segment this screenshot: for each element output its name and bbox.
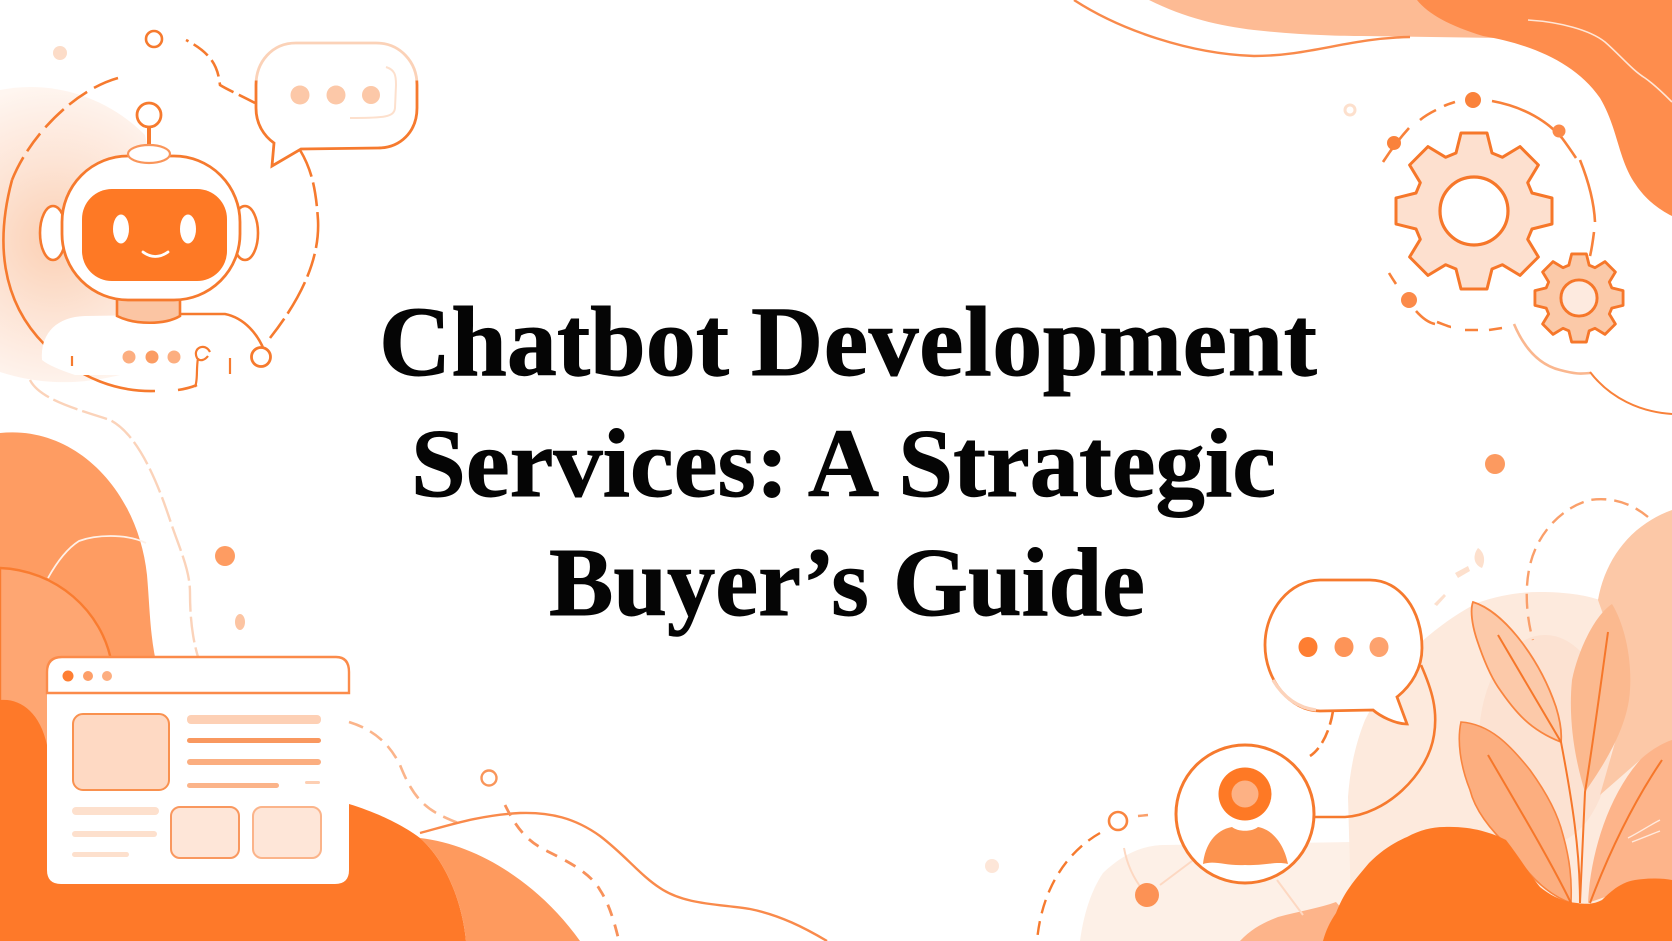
decoration: dot bottom [1135,883,1159,907]
dashed orbit [3,78,318,391]
leaf highlights [1628,820,1660,842]
background blob: bottom left dark [0,700,466,941]
title line 3: Buyer’s Guide [549,529,1145,637]
decoration: pale dot top left [53,46,67,60]
ring on body [252,348,270,366]
avatar body [1203,827,1288,865]
robot body [42,314,263,375]
background blob: left arc [0,568,112,800]
bubble dots [290,86,380,104]
chest dots [122,350,180,364]
background blob: pale bottom centre [1080,842,1352,941]
decorative line: white arc on left blob [48,536,146,578]
background blob: robot glow [0,87,170,382]
decorative line: top right white squiggle [1528,20,1672,102]
decoration: dash near ring [1138,815,1148,816]
background blob: top right dark [1417,0,1672,216]
decorative line: top wave [1074,0,1410,56]
browser window illustration [47,657,349,884]
decoration: dot left [215,546,235,566]
decorative line: bottom wave [420,813,827,941]
plant illustration [1459,602,1672,903]
decoration: ring bottom [1109,812,1127,830]
robot neck [117,298,180,323]
robot antenna [137,103,161,148]
gears illustration [1345,92,1672,414]
orbit dashes [1383,101,1672,414]
robot head [62,156,240,300]
image placeholder small two [253,807,321,858]
title [379,286,1318,637]
window control dots [62,670,112,682]
robot ears [40,206,258,260]
leaf top right [1571,604,1630,792]
decorative line: bottom dashed [505,805,619,941]
decorative line: dashed from window [349,722,462,824]
image placeholder small one [171,807,239,858]
decoration: small drop left [235,614,245,630]
robot smile [143,252,168,256]
robot illustration [3,31,318,391]
text lines right [187,715,321,788]
leaf middle left [1459,722,1571,903]
title line 2: Services: A Strategic [411,410,1276,518]
background blob: left mid orange [0,432,158,800]
leaf veins and stem [1488,632,1662,903]
background blob: bottom right mid [1240,902,1370,941]
decorative line: dashed link between user and bubble [1310,711,1333,756]
decorative line: left dashed path [30,380,198,657]
inner highlight [350,67,396,118]
text lines left [72,807,159,857]
decoration: ring near bottom [482,770,496,786]
bubble outline [256,43,417,166]
chat bubble top left [256,43,417,166]
title line 1: Chatbot [379,286,729,397]
chest marks [72,347,230,387]
avatar circle [1176,745,1314,883]
background blob: peach right [1598,510,1672,795]
image placeholder large [73,714,169,790]
leaf top left [1472,602,1561,742]
antenna cap [128,145,170,163]
pale edge [1273,680,1316,710]
decorative line: right dashed arc [1527,499,1648,640]
robot face screen [82,189,227,281]
background blob: inner pale behind plant [1479,635,1611,845]
decoration: dot right [1485,454,1505,474]
avatar head [1218,768,1272,820]
dashed link to bubble [186,40,255,103]
robot eyes [113,214,196,244]
ring [146,31,162,47]
decoration: small leaf sparkle [1434,548,1484,606]
back leaf [1490,808,1572,903]
decorative line: arc behind user [1315,665,1435,817]
decorative line: dashed arc bottom [1037,833,1100,941]
large gear [1396,133,1552,289]
title line 1: Development [751,286,1318,397]
bubble outline [1265,580,1422,724]
background blob: pale right [1348,592,1672,941]
decoration: pale connector [1124,848,1303,915]
bubble dots [1298,637,1388,657]
small gear [1535,254,1623,342]
leaf right [1588,740,1672,903]
background blob: bottom left light [420,838,580,941]
background blob: top right light [1149,0,1500,38]
user avatar [1176,745,1314,883]
chat bubble bottom right [1265,580,1422,724]
background blob: bottom right dark [1323,827,1672,941]
decoration: pale dot bottom [985,859,999,873]
window frame [47,657,349,884]
orbit dots [1345,92,1566,308]
